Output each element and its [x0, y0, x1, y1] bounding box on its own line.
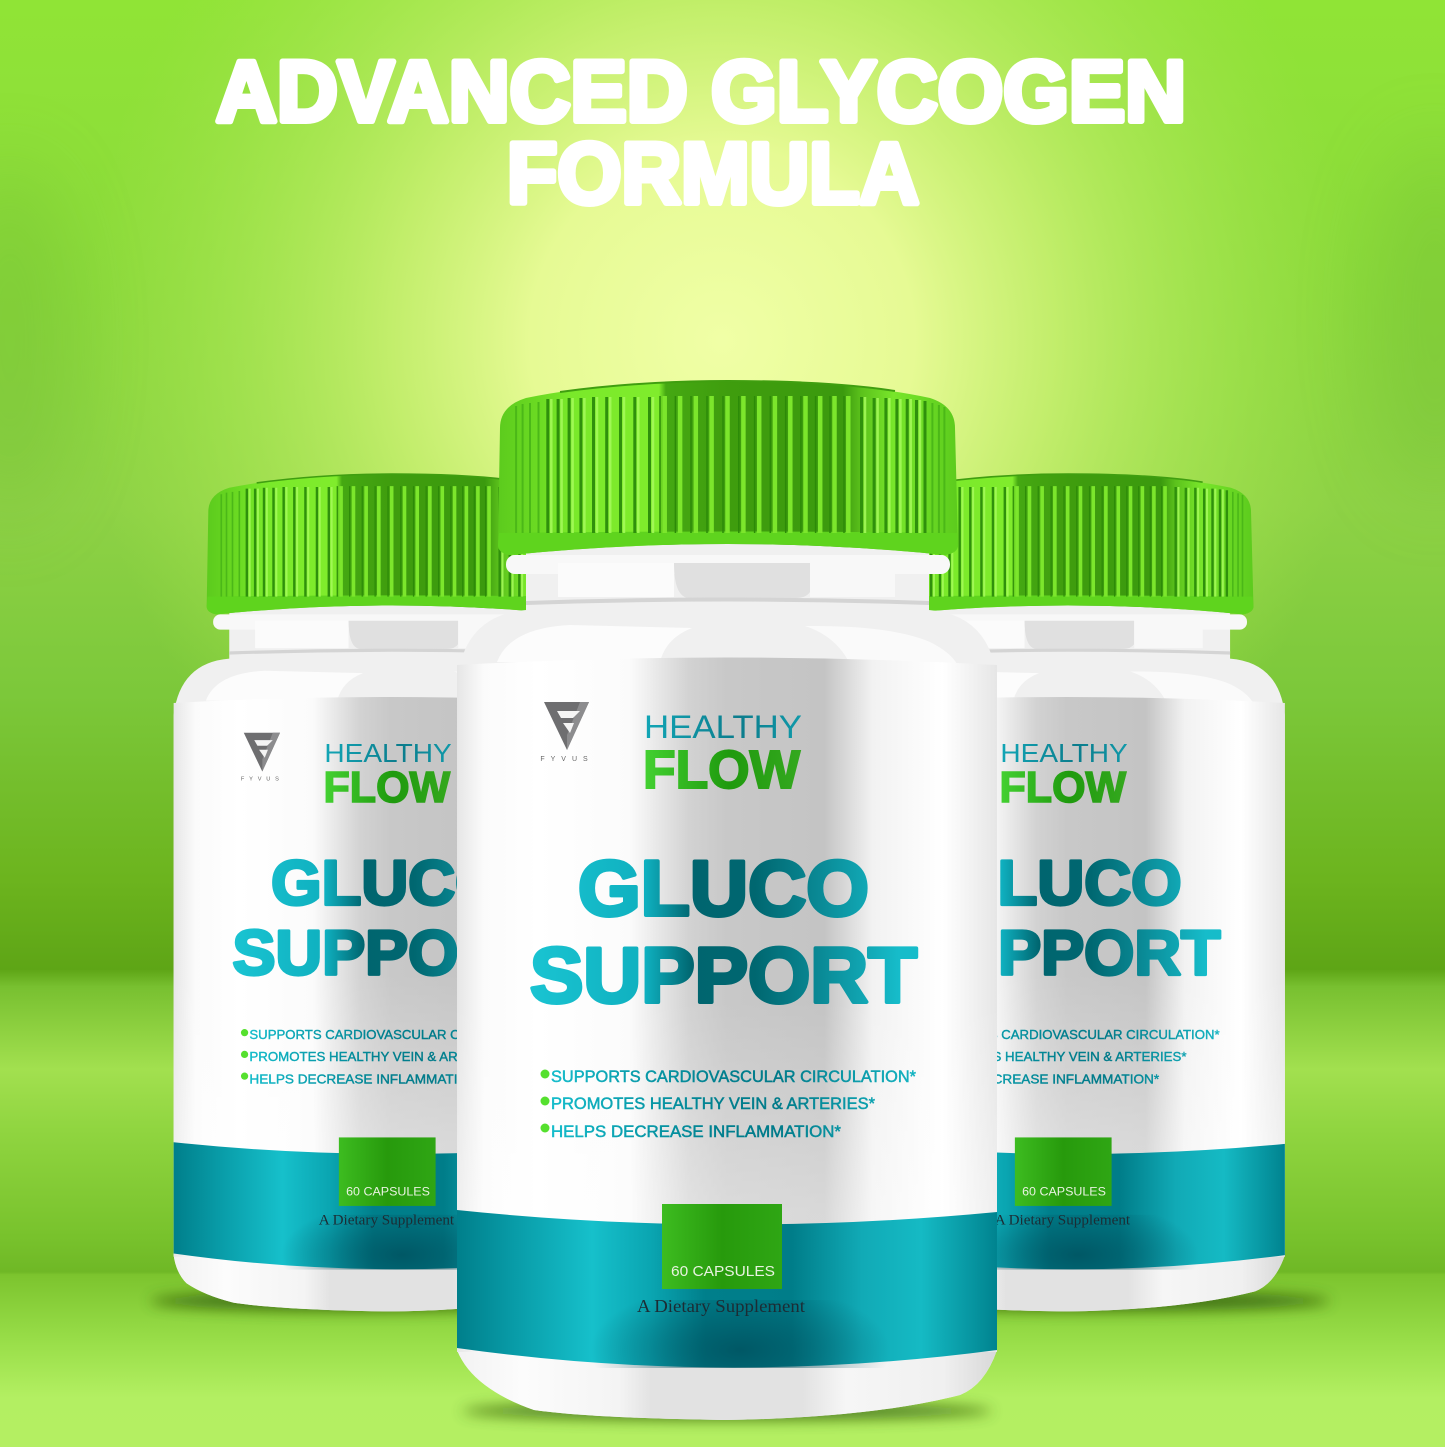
supplement line: A Dietary Supplement	[319, 1212, 454, 1228]
product name: SUPPORT	[530, 931, 917, 1019]
capsules box: 60 CAPSULES	[1022, 1184, 1106, 1198]
benefits list	[241, 1027, 544, 1086]
neck ring	[889, 614, 1247, 630]
supplement line: A Dietary Supplement	[995, 1212, 1130, 1228]
benefits list	[917, 1027, 1220, 1086]
cap	[207, 474, 577, 614]
benefits list: HELPS DECREASE INFLAMMATION*	[249, 1071, 483, 1086]
label panel	[457, 658, 997, 1352]
title: FORMULA	[507, 126, 919, 222]
body	[850, 602, 1285, 1312]
teal band	[850, 1142, 1285, 1269]
capsules box: 60 CAPSULES	[346, 1184, 430, 1198]
capsules box	[339, 1137, 436, 1206]
brand: HEALTHY	[1000, 740, 1128, 768]
bottle base	[850, 1251, 1285, 1312]
bottle: right	[850, 474, 1285, 1312]
cap	[883, 474, 1253, 614]
benefits list	[540, 1068, 917, 1141]
product name: SUPPORT	[908, 919, 1220, 989]
brand: FLOW	[324, 764, 451, 812]
product name: GLUCO	[271, 848, 506, 918]
product name: GLUCO	[947, 848, 1182, 918]
logo: FYVUS	[241, 776, 284, 782]
shoulder highlights	[497, 625, 957, 664]
teal band	[174, 1142, 609, 1269]
supplement line: A Dietary Supplement	[637, 1296, 805, 1316]
neck highlights	[905, 621, 1230, 653]
title	[216, 44, 1186, 222]
neck ring	[213, 614, 571, 630]
logo: FYVUS	[540, 756, 594, 763]
benefits list: PROMOTES HEALTHY VEIN & ARTERIES*	[925, 1049, 1187, 1064]
body	[457, 540, 997, 1420]
brand: FLOW	[643, 740, 800, 800]
product name	[530, 844, 917, 1019]
bottle base	[457, 1345, 997, 1420]
capsules box: 60 CAPSULES	[671, 1263, 775, 1280]
title: ADVANCED GLYCOGEN	[216, 44, 1186, 140]
benefits list: HELPS DECREASE INFLAMMATION*	[551, 1123, 842, 1141]
brand	[324, 740, 452, 812]
shoulder highlights	[206, 671, 577, 702]
shoulder highlights	[882, 671, 1253, 702]
product name	[232, 848, 544, 989]
label panel	[174, 697, 609, 1257]
benefits list: SUPPORTS CARDIOVASCULAR CIRCULATION*	[925, 1027, 1220, 1042]
brand: FLOW	[1000, 764, 1127, 812]
benefits list: SUPPORTS CARDIOVASCULAR CIRCULATION*	[551, 1068, 917, 1086]
bottle base	[174, 1251, 609, 1312]
product name: SUPPORT	[232, 919, 544, 989]
logo	[241, 733, 284, 782]
cap	[498, 381, 958, 555]
shadow: center bottle	[462, 1402, 992, 1420]
capsules box	[1015, 1137, 1112, 1206]
benefits list: PROMOTES HEALTHY VEIN & ARTERIES*	[551, 1095, 876, 1113]
capsules box	[662, 1204, 782, 1289]
neck highlights	[526, 563, 929, 603]
benefits list: PROMOTES HEALTHY VEIN & ARTERIES*	[249, 1049, 511, 1064]
shadow: left bottle	[150, 1291, 570, 1311]
bottle: left	[174, 474, 609, 1312]
brand	[643, 709, 802, 800]
teal band	[457, 1210, 997, 1368]
shadow: right bottle	[880, 1291, 1330, 1311]
neck ring	[506, 555, 950, 574]
body	[174, 602, 609, 1312]
brand	[1000, 740, 1128, 812]
logo	[540, 702, 594, 763]
product name	[908, 848, 1220, 989]
label panel	[850, 697, 1285, 1257]
brand: HEALTHY	[324, 740, 452, 768]
logo	[917, 733, 960, 782]
product name: GLUCO	[578, 844, 869, 932]
benefits list: SUPPORTS CARDIOVASCULAR CIRCULATION*	[249, 1027, 544, 1042]
neck highlights	[229, 621, 554, 653]
brand: HEALTHY	[644, 709, 802, 745]
bottle: center	[457, 381, 997, 1420]
benefits list: HELPS DECREASE INFLAMMATION*	[925, 1071, 1159, 1086]
logo: FYVUS	[917, 776, 960, 782]
